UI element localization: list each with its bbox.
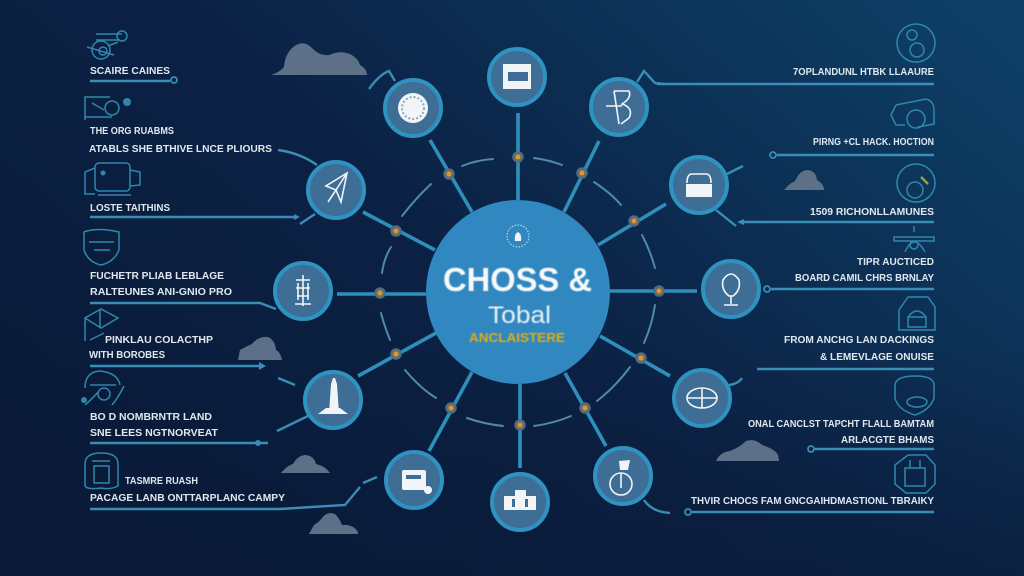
- node: bottom: [492, 474, 548, 530]
- node: right upper: [671, 157, 727, 213]
- node: bottom right: [595, 448, 651, 504]
- label: BO D NOMBRNTR LAND: [90, 411, 212, 423]
- left item 6: [81, 371, 268, 446]
- icon: drum and gear: [891, 99, 934, 128]
- icon: figure: [81, 371, 124, 405]
- icon: gears: [87, 31, 127, 59]
- dashed ring segments: [381, 158, 655, 426]
- node: right: [703, 261, 759, 317]
- icon: shield: [84, 230, 119, 265]
- label: PINKLAU COLACTHP: [105, 334, 213, 346]
- icon: circle emblem: [897, 24, 935, 62]
- right item 1: [657, 24, 935, 84]
- label: SCAIRE CAINES: [90, 65, 170, 77]
- hub emblem: [507, 225, 529, 247]
- hub title: CHOSS &: [443, 261, 592, 298]
- icon: octagon robot: [899, 297, 935, 330]
- label: FROM ANCHG LAN DACKINGS: [784, 334, 934, 346]
- clouds: [238, 43, 824, 534]
- label: LOSTE TAITHINS: [90, 202, 170, 214]
- right item 6: [748, 376, 934, 452]
- right item 6: ARLACGTE BHAMS: [841, 434, 934, 446]
- left item 4: RALTEUNES ANI-GNIO PRO: [90, 286, 232, 298]
- right item 3: [737, 164, 935, 225]
- node: left: [275, 263, 331, 319]
- right item 4: BOARD CAMIL CHRS BRNLAY: [795, 272, 934, 284]
- right item 7: [685, 455, 935, 515]
- icon: globe emblem: [897, 164, 935, 202]
- hub tag: ANCLAISTERE: [469, 331, 565, 345]
- icon: screen and gear: [85, 97, 131, 120]
- icon: drone: [894, 226, 934, 252]
- label: 1509 RICHONLLAMUNES: [810, 206, 934, 218]
- icon: helmet: [895, 376, 934, 415]
- node: bottom left: [386, 452, 442, 508]
- left item 3: [85, 163, 300, 220]
- node: left lower: [305, 372, 361, 428]
- icon: envelope: [85, 309, 118, 341]
- icon: badge: [85, 453, 118, 489]
- node: top left: [385, 80, 441, 136]
- node: right lower: [674, 370, 730, 426]
- hub subtitle: Tobal: [488, 302, 551, 329]
- label: PIRNG +CL HACK. HOCTION: [813, 136, 934, 148]
- left item 4: [84, 230, 276, 309]
- center hub: [426, 200, 610, 384]
- label: THVIR CHOCS FAM GNCGAIHDMASTIONL TBRAIKY: [691, 495, 934, 507]
- left item 7: [85, 453, 360, 509]
- label: THE ORG RUABMS: [90, 125, 174, 137]
- right item 4: [764, 226, 934, 292]
- icon: octagon device: [895, 455, 935, 493]
- label: TASMRE RUASH: [125, 475, 198, 487]
- label: ONAL CANCLST TAPCHT FLALL BAMTAM: [748, 418, 934, 430]
- label: TIPR AUCTICED: [857, 256, 934, 268]
- right item 2: [770, 99, 934, 158]
- left item 1: [87, 31, 177, 83]
- right item 5: [757, 297, 935, 369]
- label: FUCHETR PLIAB LEBLAGE: [90, 270, 224, 282]
- node: top: [489, 49, 545, 105]
- spokes: [337, 113, 697, 468]
- left item 5: WITH BOROBES: [89, 349, 165, 361]
- connector stubs: [277, 71, 743, 513]
- left item 5: [85, 309, 266, 370]
- left item 6: SNE LEES NGTNORVEAT: [90, 427, 219, 439]
- left item 2: [85, 97, 272, 155]
- left item 7: PACAGE LANB ONTTARPLANC CAMPY: [90, 492, 285, 504]
- label: 7OPLANDUNL HTBK LLAAURE: [793, 66, 934, 78]
- node: top right: [591, 79, 647, 135]
- node: left upper: [308, 162, 364, 218]
- right item 5: & LEMEVLAGE ONUISE: [820, 351, 934, 363]
- icon: device: [85, 163, 140, 195]
- left item 2: ATABLS SHE BTHIVE LNCE PLIOURS: [89, 143, 272, 155]
- spoke junction dots: [375, 152, 664, 430]
